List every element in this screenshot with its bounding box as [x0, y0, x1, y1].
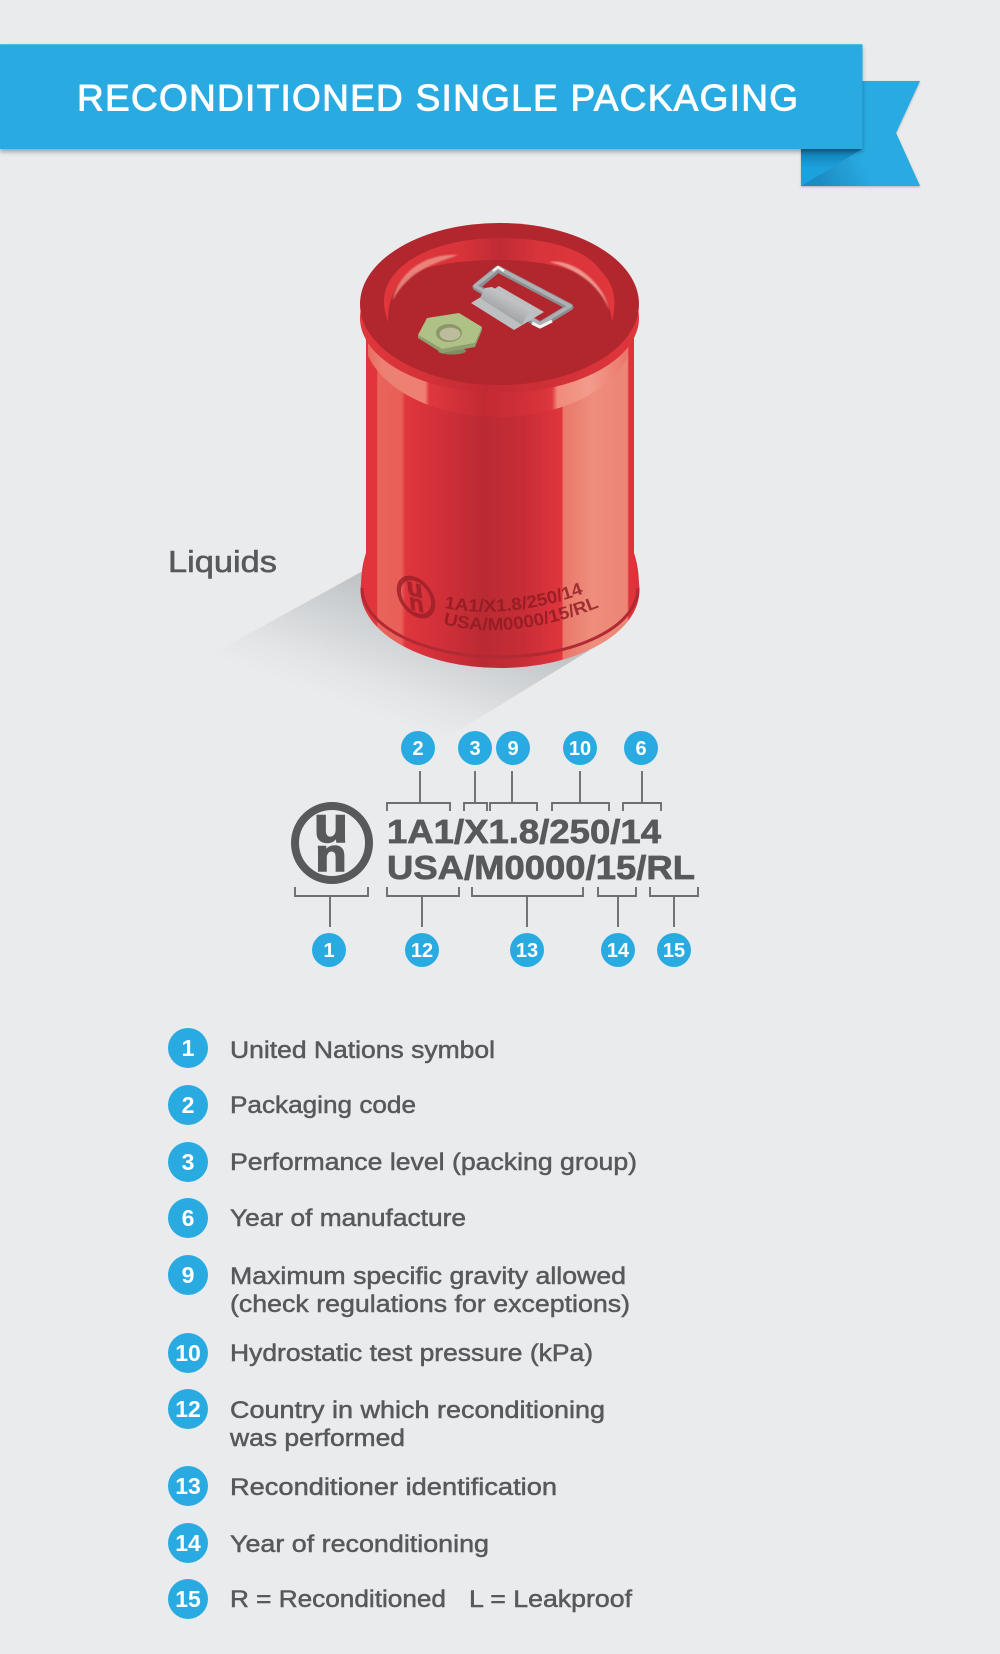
- legend item 2: 2: [182, 1092, 194, 1118]
- legend: [168, 1028, 637, 1619]
- top callout 2: [387, 731, 450, 811]
- drum bottom rim: [360, 512, 640, 668]
- legend item 9: [168, 1255, 630, 1318]
- drum body: [366, 320, 634, 570]
- drum UN marking: USA/M0000/15/RL: [444, 598, 599, 630]
- legend item 3: Performance level (packing group): [230, 1149, 637, 1176]
- legend item 6: Year of manufacture: [230, 1205, 466, 1232]
- drum UN marking: n: [408, 589, 425, 619]
- lid side: [360, 243, 639, 393]
- bottom callout 12: 12: [411, 940, 433, 962]
- bottom callout 1: 1: [323, 940, 335, 962]
- top callout 9: [490, 731, 537, 811]
- drum UN marking: u: [405, 573, 424, 604]
- legend item 12: was performed: [229, 1425, 405, 1452]
- top callout 3: [458, 731, 492, 811]
- legend item 6: 6: [182, 1205, 194, 1231]
- fitting nut: [418, 313, 482, 354]
- legend item 10: [168, 1333, 593, 1373]
- legend item 13: [168, 1466, 557, 1506]
- handle hinge plate: [471, 286, 544, 330]
- bottom callout 14: 14: [607, 940, 630, 962]
- bottom callout 15: 15: [663, 940, 685, 962]
- legend item 10: Hydrostatic test pressure (kPa): [230, 1340, 593, 1367]
- label: Liquids: Liquids: [168, 544, 277, 579]
- legend item 15: 15: [175, 1586, 201, 1612]
- legend item 9: Maximum specific gravity allowed: [230, 1263, 626, 1290]
- handle ring: [475, 267, 570, 327]
- legend item 6: [168, 1198, 466, 1238]
- bottom callout 14: [598, 887, 636, 967]
- top callout 10: [552, 731, 609, 811]
- legend item 15: L = Leakproof: [469, 1586, 632, 1613]
- top callout 6: 6: [635, 738, 647, 760]
- marking code text: USA/M0000/15/RL: [387, 850, 695, 887]
- bottom callout 13: 13: [516, 940, 538, 962]
- bottom callout 15: [650, 887, 698, 967]
- marking code text: 1A1/X1.8/250/14: [387, 814, 661, 851]
- legend item 2: [168, 1085, 416, 1125]
- top callout 9: 9: [507, 738, 519, 760]
- red drum: [360, 223, 640, 668]
- legend item 12: Country in which reconditioning: [230, 1397, 605, 1424]
- top callout 6: [623, 731, 661, 811]
- legend item 13: Reconditioner identification: [230, 1474, 557, 1501]
- drum UN marking: [396, 573, 599, 630]
- top callout 2: 2: [412, 738, 424, 760]
- upper bead: [368, 343, 628, 417]
- legend item 3: [168, 1142, 637, 1182]
- legend item 13: 13: [175, 1473, 201, 1499]
- legend item 10: 10: [175, 1340, 201, 1366]
- title banner: [0, 44, 920, 186]
- marking code text: [387, 814, 695, 887]
- legend item 14: Year of reconditioning: [230, 1531, 489, 1558]
- legend item 12: [168, 1389, 605, 1452]
- legend item 9: 9: [182, 1262, 194, 1288]
- legend item 15: R = Reconditioned: [230, 1586, 446, 1613]
- bottom callout 13: [472, 887, 583, 967]
- legend item 1: United Nations symbol: [230, 1037, 495, 1064]
- legend item 12: 12: [175, 1396, 201, 1422]
- title banner: RECONDITIONED SINGLE PACKAGING: [77, 78, 798, 118]
- UN symbol: n: [315, 830, 347, 881]
- top callout 10: 10: [569, 738, 591, 760]
- bottom callout 12: [387, 887, 459, 967]
- lid top: [360, 223, 639, 385]
- UN symbol: u: [314, 798, 348, 853]
- drum UN marking: 1A1/X1.8/250/14: [445, 582, 583, 612]
- legend item 1: 1: [182, 1035, 195, 1061]
- legend item 2: Packaging code: [230, 1092, 416, 1119]
- legend item 9: (check regulations for exceptions): [230, 1291, 630, 1318]
- drum shadow: [205, 572, 590, 748]
- bottom callout 1: [295, 887, 368, 967]
- UN symbol: [295, 798, 369, 881]
- legend item 3: 3: [182, 1149, 194, 1175]
- top callout 3: 3: [469, 738, 481, 760]
- legend item 14: 14: [175, 1530, 201, 1556]
- legend item 14: [168, 1523, 489, 1563]
- legend item 1: [168, 1028, 495, 1068]
- legend item 15: [168, 1579, 632, 1619]
- lid recess: [384, 238, 614, 322]
